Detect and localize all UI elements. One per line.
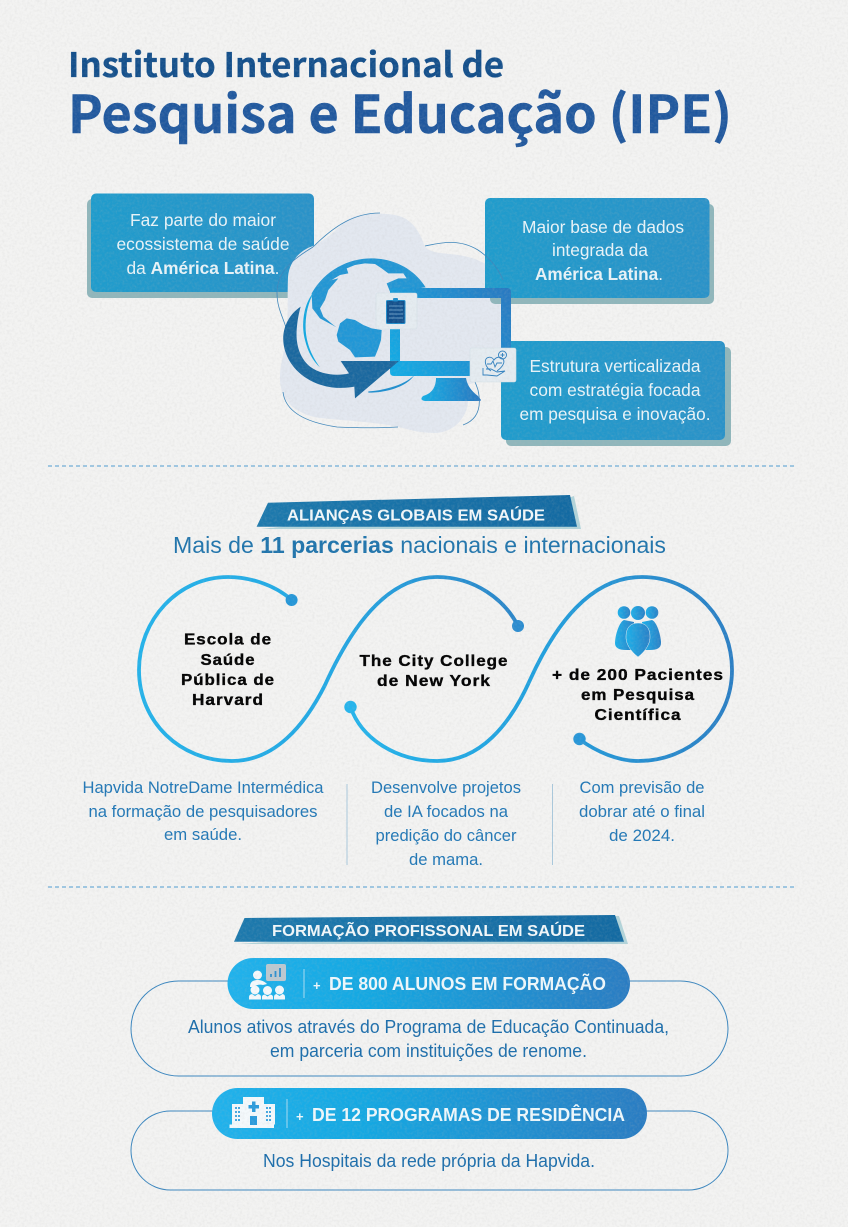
- card: estrutura verticalizada: Estrutura verticalizada: [530, 356, 701, 376]
- section banner: alianças globais: ALIANÇAS GLOBAIS EM SAÚDE: [287, 506, 545, 524]
- text: previsão: dobrar até o final: [579, 803, 705, 821]
- globe: ocean and coast: [312, 258, 426, 327]
- text: projetos IA: Desenvolve projetos: [371, 779, 521, 797]
- stat: pacientes: [552, 667, 724, 724]
- text: Hapvida formação: Hapvida NotreDame Intermédica: [82, 779, 324, 797]
- card: base de dados: América Latina.: [535, 264, 663, 284]
- text: projetos IA: de IA focados na: [384, 803, 509, 821]
- card: estrutura verticalizada: com estratégia focada: [530, 380, 701, 400]
- partner: City College: The City College: [360, 653, 508, 670]
- globe: crescent: [303, 292, 320, 367]
- panel: programas de residência: [131, 1088, 728, 1190]
- section banner: formação profissional: [234, 915, 628, 944]
- text: Hapvida formação: em saúde.: [164, 826, 242, 844]
- panel: alunos em formação: DE 800 ALUNOS EM FORMAÇÃO: [329, 973, 606, 994]
- text: previsão: Com previsão de: [580, 779, 704, 797]
- partner: Harvard: Pública de: [181, 672, 275, 689]
- card: ecossistema: ecossistema de saúde: [116, 234, 290, 254]
- section banner: alianças globais: [257, 495, 581, 529]
- partner: Harvard: Harvard: [192, 692, 264, 709]
- text: Hapvida formação: na formação de pesquisadores: [88, 803, 318, 821]
- panel: alunos em formação: +: [313, 978, 321, 993]
- title: Pesquisa e Educação (IPE): [68, 73, 732, 148]
- globe: [303, 258, 426, 393]
- partner: City College: [360, 653, 508, 690]
- curved arrow: [283, 307, 399, 398]
- partner: Harvard: Saúde: [200, 652, 256, 669]
- card: ecossistema: Faz parte do maior: [130, 210, 276, 230]
- panel: programas de residência: +: [296, 1109, 304, 1124]
- icon: students: [249, 964, 286, 1000]
- heading: parcerias: Mais de 11 parcerias nacionais e internacionais: [173, 532, 666, 558]
- background blob: [280, 214, 508, 433]
- globe: lower arc: [368, 375, 414, 393]
- text: projetos IA: [371, 779, 521, 869]
- card: estrutura verticalizada: em pesquisa e inovação.: [520, 404, 710, 424]
- s-curve: first stroke: [139, 577, 524, 761]
- section banner: formação profissional: FORMAÇÃO PROFISSONAL EM SAÚDE: [272, 920, 585, 940]
- icon: clipboard tile: [376, 293, 417, 329]
- panel: alunos em formação: em parceria com instituições de renome.: [270, 1040, 587, 1061]
- card: ecossistema: da América Latina.: [126, 258, 279, 278]
- partner: Harvard: Escola de: [184, 632, 272, 648]
- card: base de dados: integrada da: [552, 240, 648, 260]
- card: estrutura verticalizada: [501, 341, 731, 446]
- panel: programas de residência: Nos Hospitais da rede própria da Hapvida.: [263, 1150, 595, 1171]
- title: Instituto Internacional de: [68, 38, 504, 87]
- panel: alunos em formação: Alunos ativos através do Programa de Educação Continuada,: [188, 1016, 669, 1037]
- illustration: globe and monitor: [277, 213, 516, 428]
- text: previsão: [579, 779, 705, 845]
- monitor frame: [390, 288, 511, 376]
- partner: Harvard: [181, 632, 275, 709]
- text: projetos IA: predição do câncer: [376, 827, 517, 845]
- text: previsão: de 2024.: [609, 827, 675, 845]
- globe: south america: [337, 318, 382, 357]
- card: ecossistema: [87, 194, 314, 298]
- stat: pacientes: + de 200 Pacientes: [552, 667, 724, 684]
- partner: City College: de New York: [377, 673, 491, 690]
- text: projetos IA: de mama.: [409, 851, 483, 869]
- stat: pacientes: em Pesquisa: [581, 687, 695, 704]
- icon: people: [615, 606, 661, 657]
- card: base de dados: [485, 198, 714, 304]
- s-curve: second stroke: [344, 577, 732, 761]
- divider: [48, 465, 796, 467]
- title: [68, 38, 732, 148]
- card: base de dados: Maior base de dados: [522, 217, 684, 237]
- panel: alunos em formação: [131, 958, 728, 1076]
- thin outline around blob: [277, 213, 503, 428]
- panel: programas de residência: DE 12 PROGRAMAS DE RESIDÊNCIA: [312, 1104, 625, 1125]
- monitor stand: [421, 378, 481, 401]
- icon: hospital: [230, 1097, 275, 1128]
- icon: heart in hand tile: [470, 348, 516, 382]
- text: Hapvida formação: [82, 779, 324, 844]
- stat: pacientes: Científica: [594, 707, 682, 724]
